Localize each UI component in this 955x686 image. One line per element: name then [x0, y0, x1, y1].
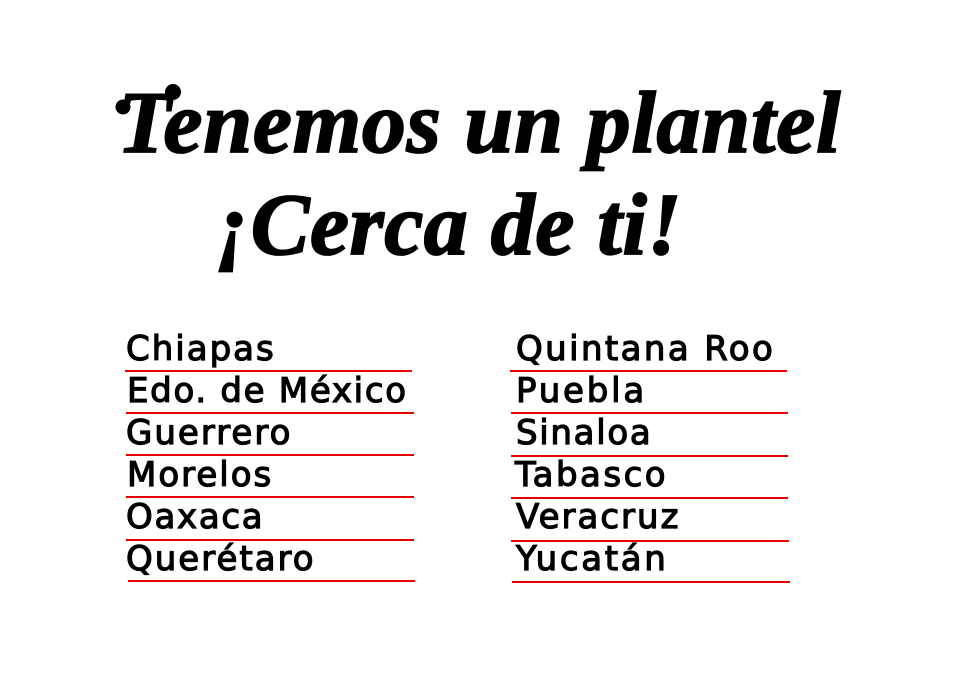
- item: Morelos: Morelos: [127, 455, 273, 495]
- item: Puebla: Puebla: [516, 371, 647, 411]
- title T ball terminals: [116, 84, 181, 114]
- title line 2: ¡Cerca de ti!: [216, 177, 682, 274]
- item: Veracruz: Veracruz: [516, 497, 680, 537]
- item: Yucatán: Yucatán: [516, 539, 669, 579]
- left column list: [125, 329, 415, 582]
- item: Quintana Roo: Quintana Roo: [516, 329, 775, 369]
- item: Oaxaca: Oaxaca: [126, 497, 264, 537]
- title line 1: Tenemos un plantel: [117, 75, 841, 172]
- item: Tabasco: Tabasco: [515, 455, 668, 495]
- right column list: [510, 329, 790, 583]
- item: Querétaro: Querétaro: [126, 539, 316, 579]
- item: Edo. de México: Edo. de México: [127, 371, 408, 411]
- item: Guerrero: Guerrero: [126, 413, 292, 453]
- item: Chiapas: Chiapas: [126, 329, 276, 369]
- item: Sinaloa: Sinaloa: [516, 413, 652, 453]
